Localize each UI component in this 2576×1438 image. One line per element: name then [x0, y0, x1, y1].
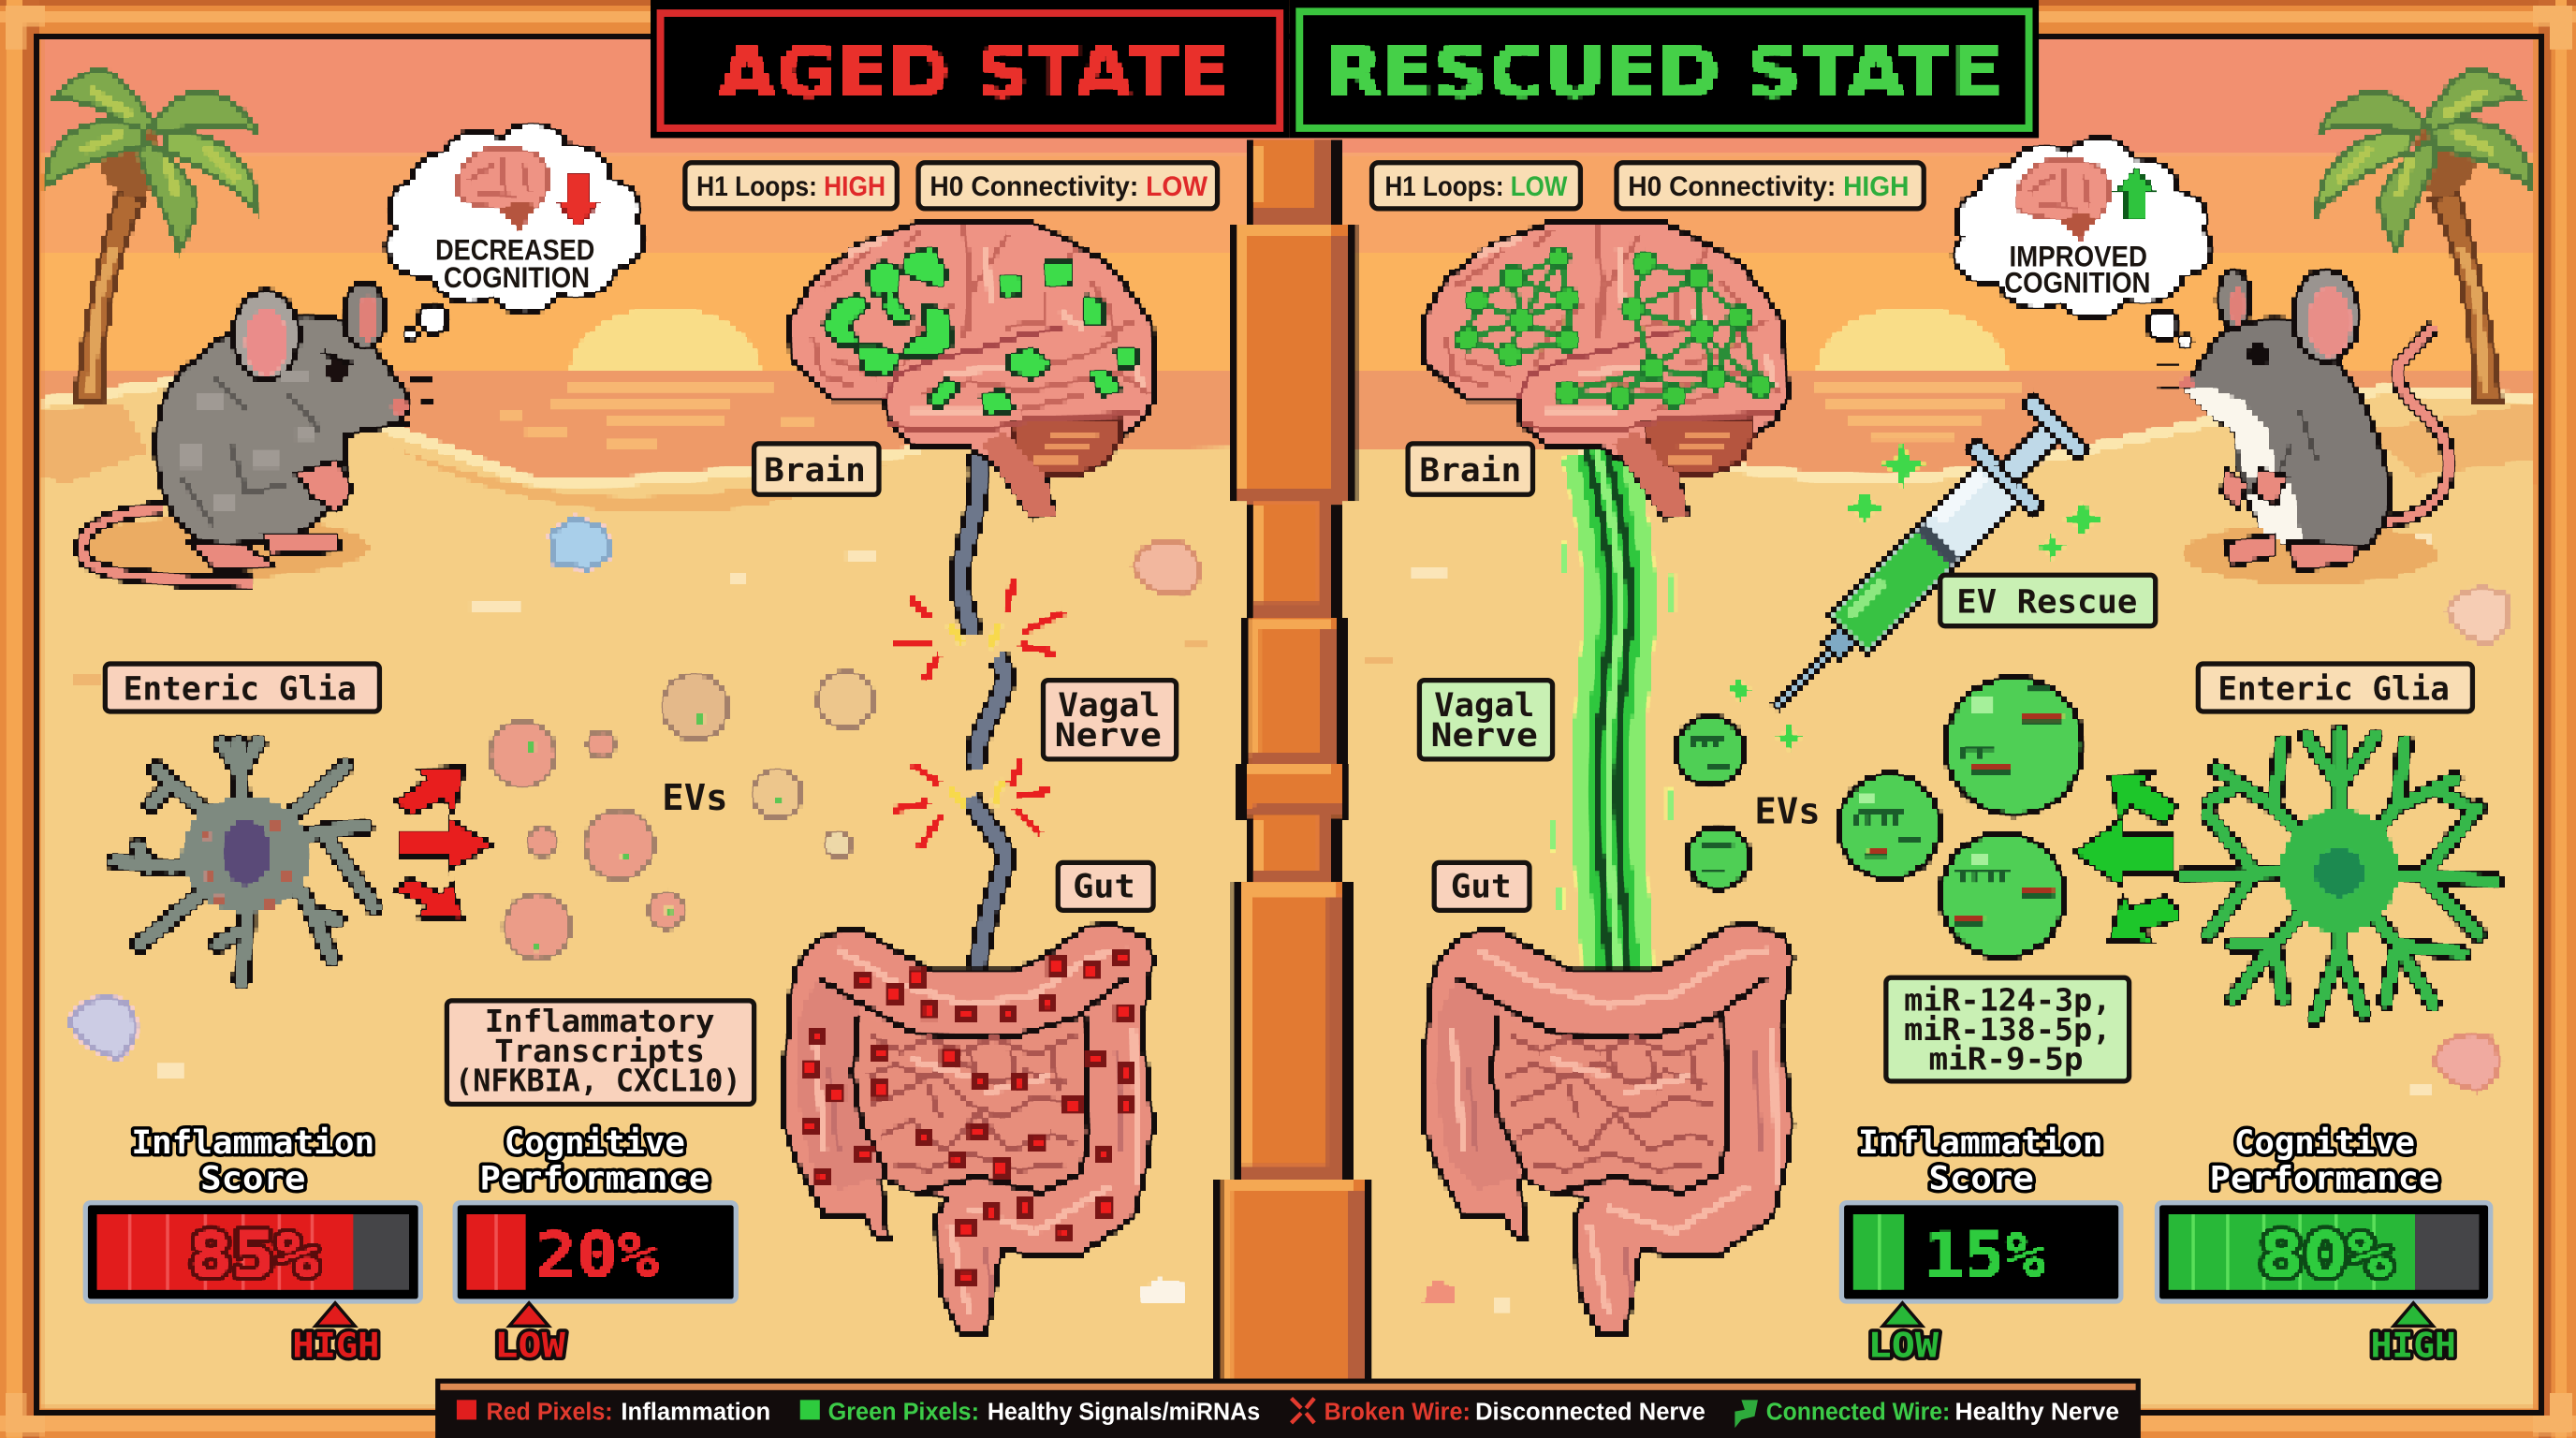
gauge: cognitive performance rescued: Cognitive	[2234, 1123, 2415, 1162]
label: miRNA list	[1886, 977, 2130, 1081]
value: inflammation aged 85%: 85%	[189, 1219, 318, 1292]
label: inflammatory transcripts: Transcripts	[494, 1033, 705, 1069]
right thought bubble	[1954, 138, 2212, 348]
label: inflammatory transcripts	[446, 1001, 754, 1104]
label: EV rescue	[1940, 575, 2156, 626]
pill: H1 loops aged	[685, 163, 897, 209]
palm tree right	[2318, 70, 2532, 403]
label: vagal nerve aged: Vagal	[1058, 686, 1160, 725]
gauge: inflammation aged: Score	[200, 1160, 305, 1198]
gauge: cognitive performance rescued	[2157, 1123, 2491, 1366]
bubble text: improved cognition	[2004, 239, 2150, 299]
gauge: inflammation rescued: LOW	[1868, 1326, 1939, 1366]
right brain	[1423, 220, 1788, 518]
pill: H0 connectivity rescued: H0 Connectivity: HIGH	[1628, 171, 1909, 202]
label: brain aged: Brain	[764, 451, 866, 490]
green arrows to EVs	[2073, 772, 2178, 943]
right gut	[1425, 925, 1793, 1336]
label: vagal nerve aged	[1043, 681, 1177, 759]
gauge: cognitive performance aged: LOW	[494, 1326, 566, 1366]
left glia cell	[115, 742, 374, 981]
pixelated percent values	[189, 1219, 2392, 1292]
label: inflammatory transcripts: (NFKBIA, CXCL10)	[455, 1062, 741, 1098]
gauge: cognitive performance rescued: HIGH	[2371, 1326, 2456, 1366]
gauge: inflammation rescued: Inflammation	[1858, 1123, 2103, 1162]
value: cognitive aged 20%: 20%	[535, 1219, 659, 1292]
syringe	[1744, 389, 2094, 739]
right mouse	[2156, 270, 2449, 585]
right glia cell	[2184, 733, 2496, 1019]
gauge: inflammation aged	[85, 1123, 420, 1366]
aged state header panel	[651, 0, 1290, 138]
legend: connected wire: Healthy Nerve	[1955, 1397, 2119, 1425]
gauge: cognitive performance rescued: Performance	[2210, 1160, 2439, 1198]
legend: red pixels	[457, 1397, 770, 1425]
label: gut rescued: Gut	[1451, 867, 1512, 905]
title: rescued state: RESCUED STATE	[1325, 32, 2002, 114]
label: brain aged	[754, 444, 879, 494]
label: vagal nerve aged: Nerve	[1055, 716, 1162, 755]
left brain	[790, 220, 1155, 518]
pill: H0 connectivity aged: H0 Connectivity: LOW	[929, 171, 1208, 202]
legend: connected wire: Connected Wire:	[1766, 1397, 1950, 1425]
bubble text: improved cognition: IMPROVED	[2009, 239, 2147, 272]
right vagal nerve (healthy glow)	[1553, 450, 1673, 971]
label: vagal nerve rescued: Vagal	[1434, 686, 1534, 725]
green sparkles	[1727, 440, 2103, 751]
bubble text: decreased cognition: COGNITION	[444, 260, 590, 294]
label: EVs rescued: EVs	[1754, 790, 1821, 832]
legend: connected wire	[1734, 1397, 2119, 1428]
value: inflammation rescued 15%: 15%	[1924, 1219, 2045, 1292]
right EVs with miRNA	[1676, 677, 2083, 958]
label: miRNA list: miR-138-5p,	[1904, 1011, 2111, 1048]
legend: green pixels: Healthy Signals/miRNAs	[988, 1397, 1260, 1425]
pill: H1 loops rescued	[1372, 163, 1580, 209]
label: EVs aged: EVs	[662, 777, 728, 819]
rescued state header panel	[1290, 0, 2039, 138]
gauge: cognitive performance aged: Performance	[479, 1160, 710, 1198]
sand decorations	[70, 518, 2510, 1312]
left thought bubble	[387, 124, 645, 342]
label: vagal nerve rescued	[1419, 681, 1553, 759]
bubble text: decreased cognition	[435, 232, 594, 294]
gauge: inflammation aged: HIGH	[292, 1326, 379, 1366]
pill: H0 connectivity rescued	[1617, 163, 1924, 209]
label: brain rescued: Brain	[1419, 451, 1521, 490]
gauge: inflammation rescued: Score	[1928, 1160, 2034, 1198]
label: enteric glia aged	[105, 664, 379, 712]
legend: broken wire	[1292, 1397, 1705, 1425]
value: cognitive rescued 80%: 80%	[2259, 1219, 2392, 1292]
legend: broken wire: Broken Wire:	[1325, 1397, 1471, 1425]
bubble text: improved cognition: COGNITION	[2004, 265, 2150, 299]
pill: H1 loops rescued: H1 Loops: LOW	[1385, 171, 1568, 202]
label: miRNA list: miR-9-5p	[1928, 1041, 2083, 1078]
red arrows from glia	[394, 768, 493, 920]
legend bar	[435, 1379, 2141, 1438]
label: gut rescued	[1434, 862, 1530, 910]
left vagal nerve (broken)	[960, 450, 1005, 970]
left nerve sparks	[894, 577, 1064, 848]
legend: red pixels: Red Pixels:	[487, 1397, 613, 1425]
label: miRNA list: miR-124-3p,	[1904, 981, 2111, 1018]
left mouse	[74, 283, 435, 583]
legend: broken wire: Disconnected Nerve	[1475, 1397, 1705, 1425]
label: enteric glia rescued	[2198, 664, 2472, 712]
legend: green pixels: Green Pixels:	[828, 1397, 979, 1425]
left EVs	[490, 672, 874, 960]
legend: red pixels: Inflammation	[621, 1397, 770, 1425]
gauge: cognitive performance aged	[455, 1123, 736, 1366]
title: aged state: AGED STATE	[718, 32, 1229, 114]
left gut	[785, 925, 1153, 1336]
legend: green pixels	[800, 1397, 1260, 1425]
gauge: inflammation aged: Inflammation	[131, 1123, 374, 1162]
label: brain rescued	[1408, 444, 1533, 494]
pill: H1 loops aged: H1 Loops: HIGH	[696, 171, 886, 202]
gauge: inflammation rescued	[1841, 1123, 2121, 1366]
label: inflammatory transcripts: Inflammatory	[485, 1003, 714, 1039]
pill: H0 connectivity aged	[918, 163, 1218, 209]
label: vagal nerve rescued: Nerve	[1431, 716, 1538, 755]
center pillar	[1212, 138, 1373, 1380]
pixelated headings	[718, 32, 2002, 114]
label: enteric glia aged: Enteric Glia	[124, 670, 357, 709]
label: EV rescue: EV Rescue	[1956, 583, 2137, 622]
label: enteric glia rescued: Enteric Glia	[2217, 670, 2450, 709]
palm tree left	[44, 70, 258, 403]
label: gut aged	[1058, 862, 1153, 910]
gauge: cognitive performance aged: Cognitive	[505, 1123, 685, 1162]
label: gut aged: Gut	[1073, 867, 1135, 905]
bubble text: decreased cognition: DECREASED	[435, 232, 594, 266]
